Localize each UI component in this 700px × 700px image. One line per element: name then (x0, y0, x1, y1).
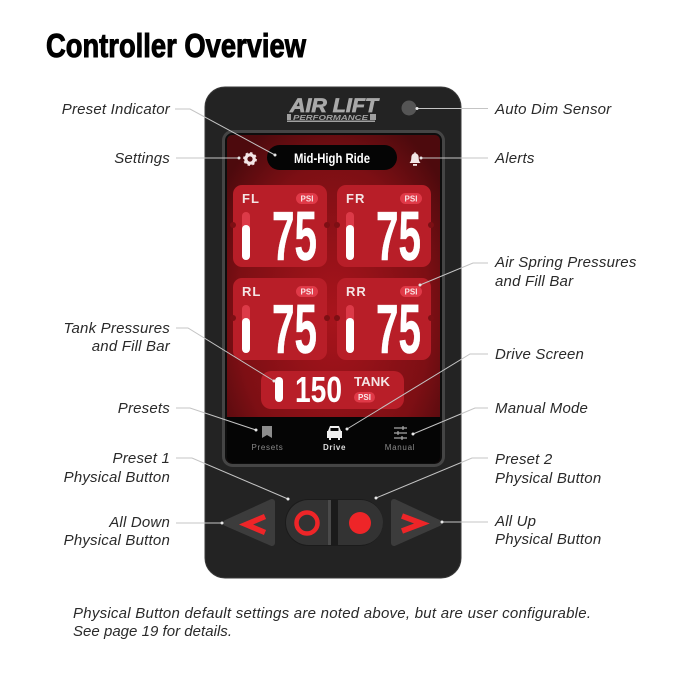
gauge: front left: FL (242, 191, 260, 206)
footnote: Physical Button default settings are noted above, but are user configurable. (73, 605, 591, 622)
label: air spring pressures (494, 254, 637, 290)
title: Controller Overview (46, 27, 306, 64)
label: preset 2: Physical Button (495, 470, 601, 487)
gauge: rear left (230, 278, 330, 368)
label: preset 2 (495, 451, 601, 487)
leader: presets (176, 408, 258, 432)
tank gauge: TANK (354, 374, 391, 389)
leader: tank pressures (176, 328, 276, 382)
leader: manual (412, 408, 488, 436)
label: presets: Presets (118, 400, 170, 417)
air lift logo (287, 96, 380, 122)
label: all up (494, 513, 601, 548)
label: air spring pressures: Air Spring Pressures (494, 254, 637, 271)
screen (227, 135, 440, 463)
leader: drive screen (346, 354, 488, 430)
footnote: See page 19 for details. (73, 623, 232, 640)
gauge: front left: PSI (301, 194, 313, 204)
gauge: front right: FR (346, 191, 365, 206)
leader: settings (176, 156, 240, 160)
label: preset 2: Preset 2 (495, 451, 553, 468)
gauge: rear right: 75 (376, 290, 421, 368)
label: all down: Physical Button (64, 532, 170, 549)
gauge: rear right (334, 278, 434, 368)
air lift logo: PERFORMANCE (293, 113, 369, 122)
device body (205, 87, 461, 578)
gauge: front left: 75 (272, 197, 317, 275)
preset indicator pill (267, 145, 397, 170)
physical button: all down (226, 502, 272, 543)
physical button: preset 1 (286, 500, 331, 545)
controller device (205, 87, 461, 578)
label: tank pressures (64, 320, 171, 355)
leader: preset indicator (175, 109, 276, 156)
gauge: rear right: PSI (405, 288, 417, 296)
leader: alerts (420, 156, 488, 160)
leader: preset 1 (176, 458, 290, 500)
tank gauge: PSI (358, 393, 371, 402)
label: all up: Physical Button (495, 531, 601, 548)
label: preset 1: Physical Button (64, 469, 170, 486)
leader: all down (176, 522, 224, 524)
gauge: front right (334, 185, 434, 275)
leader: auto dim (416, 107, 488, 110)
bottom nav bar (227, 417, 440, 463)
label: tank pressures: Tank Pressures (64, 320, 170, 337)
label: preset 1 (64, 450, 170, 486)
label: settings: Settings (114, 150, 170, 167)
gauge: front left (230, 185, 330, 275)
gauge: rear left: 75 (272, 290, 317, 368)
icon: presets bookmark (262, 426, 272, 438)
physical button: preset 2 (338, 500, 383, 545)
leader: air spring (418, 263, 488, 286)
label: all up: All Up (494, 513, 536, 530)
gauge: rear right: RR (346, 284, 367, 299)
gauge: rear left: PSI (301, 288, 313, 296)
preset indicator pill: Mid-High Ride (294, 151, 370, 166)
physical button: all up (394, 502, 439, 543)
footnote (73, 605, 591, 640)
icon: settings gear (244, 153, 256, 165)
label: air spring pressures: and Fill Bar (495, 273, 574, 290)
icon: alert bell (410, 152, 420, 166)
tank gauge (261, 369, 404, 410)
icon: manual sliders (394, 426, 407, 440)
label: tank pressures: and Fill Bar (92, 338, 171, 355)
bottom nav bar: Manual (385, 443, 415, 452)
icon: drive car (327, 426, 342, 440)
gauge: front right: PSI (405, 194, 417, 204)
label: manual mode: Manual Mode (495, 400, 588, 417)
leader: preset 2 (374, 458, 488, 500)
label: preset 1: Preset 1 (113, 450, 170, 467)
label: preset indicator: Preset Indicator (62, 101, 171, 118)
label: all down (64, 514, 170, 549)
label: drive screen: Drive Screen (495, 346, 584, 363)
bottom nav bar: Drive (323, 443, 346, 452)
tank gauge: 150 (295, 369, 342, 410)
screen bezel (224, 132, 444, 466)
gauge: rear left: RL (242, 284, 261, 299)
auto dim sensor (402, 100, 416, 116)
air lift logo: AIR LIFT (289, 96, 380, 117)
leader: all up (440, 520, 488, 524)
label: all down: All Down (108, 514, 170, 531)
label: alerts: Alerts (494, 150, 535, 167)
physical button: preset pill body (285, 499, 383, 546)
label: auto dim sensor: Auto Dim Sensor (494, 101, 612, 118)
bottom nav bar: Presets (251, 443, 284, 452)
gauge: front right: 75 (376, 197, 421, 275)
